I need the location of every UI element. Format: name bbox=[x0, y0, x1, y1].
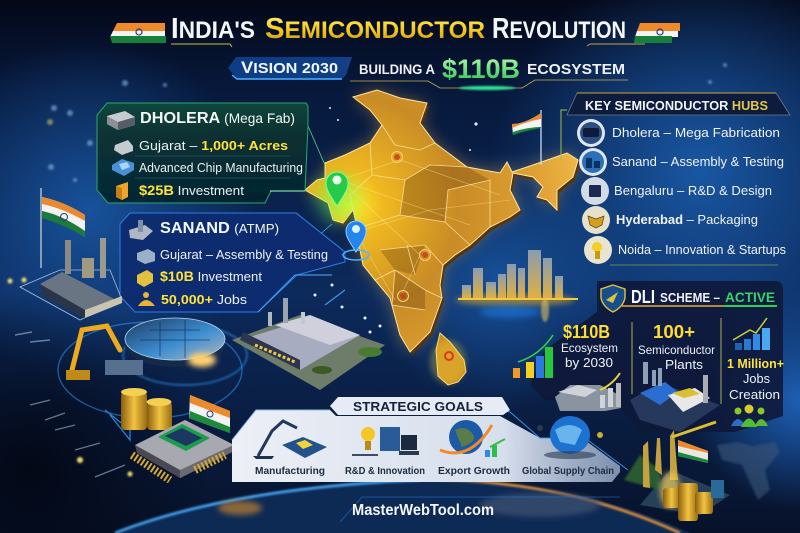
subtitle banner: BUILDING A bbox=[359, 62, 435, 77]
pin: green Dholera bbox=[315, 172, 359, 222]
icon: people bbox=[138, 292, 155, 306]
panel: Dholera: Gujarat – 1,000+ Acres bbox=[139, 139, 288, 153]
icon: left India flag bbox=[110, 23, 166, 43]
flag bbox=[678, 440, 708, 463]
subtitle banner: $110B bbox=[442, 54, 520, 84]
subtitle banner: ECOSYSTEM bbox=[527, 61, 625, 78]
heading: DHOLERA (Mega Fab) bbox=[140, 110, 295, 127]
footer URL: MasterWebTool.com bbox=[352, 502, 494, 519]
heading: SANAND (ATMP) bbox=[160, 220, 279, 237]
hub: Sanand: Sanand – Assembly & Testing bbox=[612, 155, 784, 169]
icon: gold stack bbox=[116, 182, 128, 200]
factory right bbox=[232, 298, 385, 390]
icon: chip box bbox=[112, 159, 134, 176]
wafer bbox=[125, 318, 225, 367]
subtitle banner bbox=[228, 54, 628, 90]
illustration: plants bbox=[630, 362, 720, 432]
stat: ecosystem: by 2030 bbox=[565, 355, 613, 370]
goal: manufacturing bbox=[253, 421, 327, 477]
faint world map bbox=[717, 442, 780, 500]
flag near chip bbox=[189, 395, 230, 433]
panel: DLI scheme bbox=[513, 281, 784, 432]
goal: export growth bbox=[438, 420, 510, 477]
stat: jobs: 1 Million+ bbox=[727, 357, 784, 371]
panel: Sanand: 50,000+ Jobs bbox=[161, 292, 248, 307]
goal: export growth: Export Growth bbox=[438, 465, 510, 477]
gold arrow bbox=[672, 422, 716, 437]
DLI heading: DLI bbox=[631, 287, 655, 307]
hubs heading bbox=[567, 93, 790, 115]
stat: ecosystem: Ecosystem bbox=[561, 341, 618, 355]
vision pill bbox=[228, 57, 352, 79]
goal: global supply chain: Global Supply Chain bbox=[522, 465, 614, 477]
panel: strategic goals bbox=[232, 397, 628, 482]
icon: gold box bbox=[137, 270, 153, 287]
Sri Lanka bbox=[430, 333, 466, 385]
stat: plants: 100+ bbox=[653, 322, 695, 342]
hub: Bengaluru bbox=[581, 177, 772, 205]
hub: Hyderabad: Hyderabad – Packaging bbox=[616, 213, 758, 227]
goal: R&D bbox=[345, 427, 425, 477]
goal: manufacturing: Manufacturing bbox=[255, 465, 325, 477]
left flag on pole bbox=[41, 188, 85, 268]
goal: global supply chain bbox=[522, 416, 614, 477]
icon: shield bbox=[601, 285, 625, 312]
icon: right India flag bbox=[634, 23, 680, 43]
title bbox=[110, 13, 680, 47]
stat: ecosystem bbox=[513, 322, 618, 378]
vision pill: VISION 2030 bbox=[241, 58, 338, 77]
hub: Noida: Noida – Innovation & Startups bbox=[618, 243, 786, 257]
panel: Dholera: $25B Investment bbox=[139, 182, 244, 198]
panel: Sanand bbox=[120, 213, 345, 312]
hubs heading: KEY SEMICONDUCTOR HUBS bbox=[585, 98, 768, 113]
illustration: server chart bbox=[555, 373, 621, 411]
panel: key semiconductor hubs bbox=[561, 93, 790, 265]
circuit traces bbox=[15, 275, 345, 477]
stat: plants: Semiconductor bbox=[638, 343, 715, 357]
hub: Noida bbox=[584, 236, 786, 264]
title: INDIA'S bbox=[171, 13, 255, 45]
icon: fab building bbox=[107, 111, 135, 130]
panel: Dholera: Advanced Chip Manufacturing bbox=[139, 161, 303, 175]
stat: plants: Plants bbox=[665, 357, 704, 372]
city skyline mid bbox=[455, 250, 578, 322]
hub: Dholera: Dholera – Mega Fabrication bbox=[612, 126, 780, 140]
title: SEMICONDUCTOR bbox=[265, 13, 485, 45]
pins bbox=[315, 172, 369, 260]
icon: testing unit bbox=[137, 249, 155, 264]
stat: jobs: Creation bbox=[729, 387, 780, 402]
panel: DLI scheme: ACTIVE bbox=[725, 290, 775, 305]
goals heading bbox=[330, 397, 510, 415]
goal: R&D: R&D & Innovation bbox=[345, 465, 425, 477]
stat: jobs: Jobs bbox=[743, 371, 770, 386]
icon: assembly unit bbox=[129, 220, 153, 240]
coins left bbox=[121, 388, 172, 430]
hub: Bengaluru: Bengaluru – R&D & Design bbox=[614, 184, 772, 198]
title: REVOLUTION bbox=[492, 13, 626, 45]
map of India bbox=[305, 90, 580, 385]
panel: Sanand: $10B Investment bbox=[160, 268, 262, 284]
footer URL bbox=[340, 497, 620, 522]
pin: blue Sanand bbox=[343, 221, 369, 260]
panel: Sanand: Gujarat – Assembly & Testing bbox=[160, 248, 328, 262]
hub: Dholera bbox=[577, 119, 780, 147]
goals heading: STRATEGIC GOALS bbox=[353, 400, 483, 414]
panel: Dholera bbox=[97, 103, 325, 203]
top right flag on pole bbox=[512, 110, 541, 165]
hub: Hyderabad bbox=[582, 206, 758, 234]
icon: plant bbox=[114, 140, 133, 155]
fab illustration left bbox=[20, 238, 122, 320]
coins bbox=[663, 480, 724, 521]
panel: DLI scheme: SCHEME – bbox=[660, 291, 720, 305]
chip bbox=[132, 420, 240, 480]
hub: Sanand bbox=[579, 148, 784, 176]
robot arm bbox=[66, 326, 143, 380]
bottom right city and coins bbox=[624, 422, 780, 521]
stat: ecosystem: $110B bbox=[563, 322, 610, 342]
stat: jobs bbox=[727, 318, 784, 427]
stat: plants bbox=[638, 322, 715, 372]
earth horizon bbox=[115, 480, 690, 533]
